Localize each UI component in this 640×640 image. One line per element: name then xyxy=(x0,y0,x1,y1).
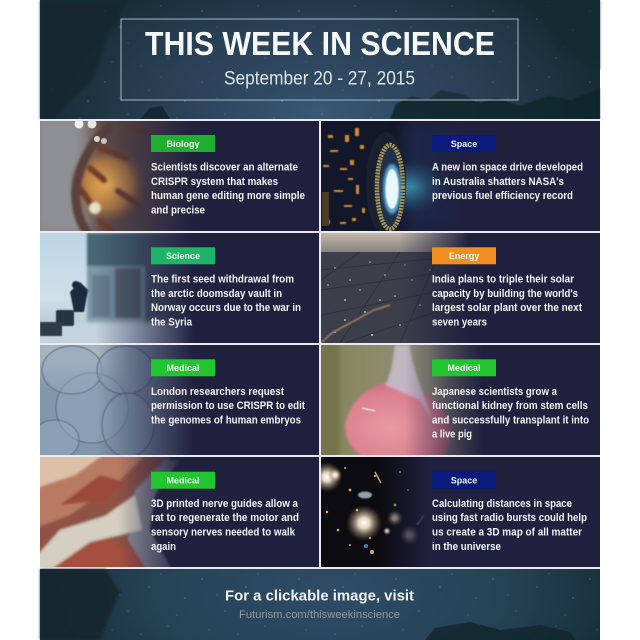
panel: kidney story xyxy=(321,345,600,455)
story text: previous fuel efficiency record xyxy=(432,190,573,202)
story text: seven years xyxy=(432,316,487,328)
badge: Energy xyxy=(432,247,496,264)
call to action: For a clickable image, visit xyxy=(225,588,414,605)
image: ion thruster xyxy=(321,121,445,231)
badge: Science: Science xyxy=(166,251,200,261)
image: DNA helix xyxy=(40,121,181,231)
badge: Space xyxy=(432,135,496,152)
title: THIS WEEK IN SCIENCE xyxy=(145,25,495,62)
story text xyxy=(432,274,582,328)
header starry background xyxy=(40,0,600,119)
story text xyxy=(151,386,305,426)
title frame xyxy=(121,19,518,100)
story text: using fast radio bursts could help xyxy=(432,512,587,524)
story text: the arctic doomsday vault in xyxy=(151,288,282,300)
footer starry background xyxy=(40,569,600,640)
badge: Medical: Medical xyxy=(166,363,200,373)
panel: embryos story xyxy=(40,345,319,455)
story text: and precise xyxy=(151,204,205,216)
panel: radio bursts story xyxy=(312,457,600,567)
white grid backing xyxy=(40,119,600,569)
story text xyxy=(432,386,589,441)
story text: in Australia shatters NASA's xyxy=(432,176,564,188)
story text: the Syria xyxy=(151,316,193,328)
story text xyxy=(151,498,299,553)
panel: biology story xyxy=(40,121,319,231)
story text: Japanese scientists grow a xyxy=(432,386,558,398)
story text xyxy=(432,498,587,553)
badge: Biology: Biology xyxy=(166,139,200,149)
date: September 20 - 27, 2015 xyxy=(224,68,415,90)
story text: Scientists discover an alternate xyxy=(151,162,298,174)
panel: seed vault story xyxy=(30,233,319,346)
story text xyxy=(432,162,583,202)
story text: India plans to triple their solar xyxy=(432,274,575,286)
badge: Biology xyxy=(151,135,215,152)
badge: Medical: Medical xyxy=(447,363,481,373)
badge: Medical xyxy=(432,359,496,376)
story text xyxy=(151,162,305,216)
badge: Space xyxy=(432,472,496,489)
story text: sensory nerves needed to walk xyxy=(151,526,296,538)
badge: Medical xyxy=(151,472,215,489)
image: embryo cells xyxy=(40,345,187,455)
image: grown kidney xyxy=(321,345,475,455)
image: galaxy cluster xyxy=(321,457,424,567)
footer url: Futurism.com/thisweekinscience xyxy=(239,609,400,621)
story text: and successfully transplant it into xyxy=(432,414,589,426)
image: solar field xyxy=(321,233,465,343)
panel: ion drive story xyxy=(321,121,600,236)
story text: Calculating distances in space xyxy=(432,498,572,510)
story text: London researchers request xyxy=(151,386,284,398)
badge: Space: Space xyxy=(451,476,477,486)
image: seed vault in snow xyxy=(40,233,189,343)
panel: header xyxy=(40,0,600,119)
story text: us create a 3D map of all matter xyxy=(432,526,583,538)
story text: The first seed withdrawal from xyxy=(151,274,294,286)
panel: solar plant story xyxy=(321,233,600,343)
story text: 3D printed nerve guides allow a xyxy=(151,498,299,510)
story text: A new ion space drive developed xyxy=(432,162,583,174)
story text: capacity by building the world's xyxy=(432,288,578,300)
story text: in the universe xyxy=(432,541,501,553)
badge: Energy: Energy xyxy=(449,251,479,261)
badge: Space: Space xyxy=(451,139,477,149)
badge: Medical: Medical xyxy=(166,476,200,486)
panel: footer xyxy=(40,569,600,640)
story text: a live pig xyxy=(432,429,472,441)
story text: rat to regenerate the motor and xyxy=(151,512,299,524)
story text: again xyxy=(151,541,176,553)
story text: Norway occurs due to the war in xyxy=(151,302,301,314)
badge: Science xyxy=(151,247,215,264)
story text: human gene editing more simple xyxy=(151,190,305,202)
story text: CRISPR system that makes xyxy=(151,176,278,188)
panel: nerve guides story xyxy=(40,457,319,567)
story text: the genomes of human embryos xyxy=(151,414,301,426)
story text xyxy=(151,274,301,328)
badge: Medical xyxy=(151,359,215,376)
story text: permission to use CRISPR to edit xyxy=(151,400,305,412)
story text: functional kidney from stem cells xyxy=(432,400,588,412)
story text: largest solar plant over the next xyxy=(432,302,582,314)
image: nerve guide xyxy=(40,457,178,567)
